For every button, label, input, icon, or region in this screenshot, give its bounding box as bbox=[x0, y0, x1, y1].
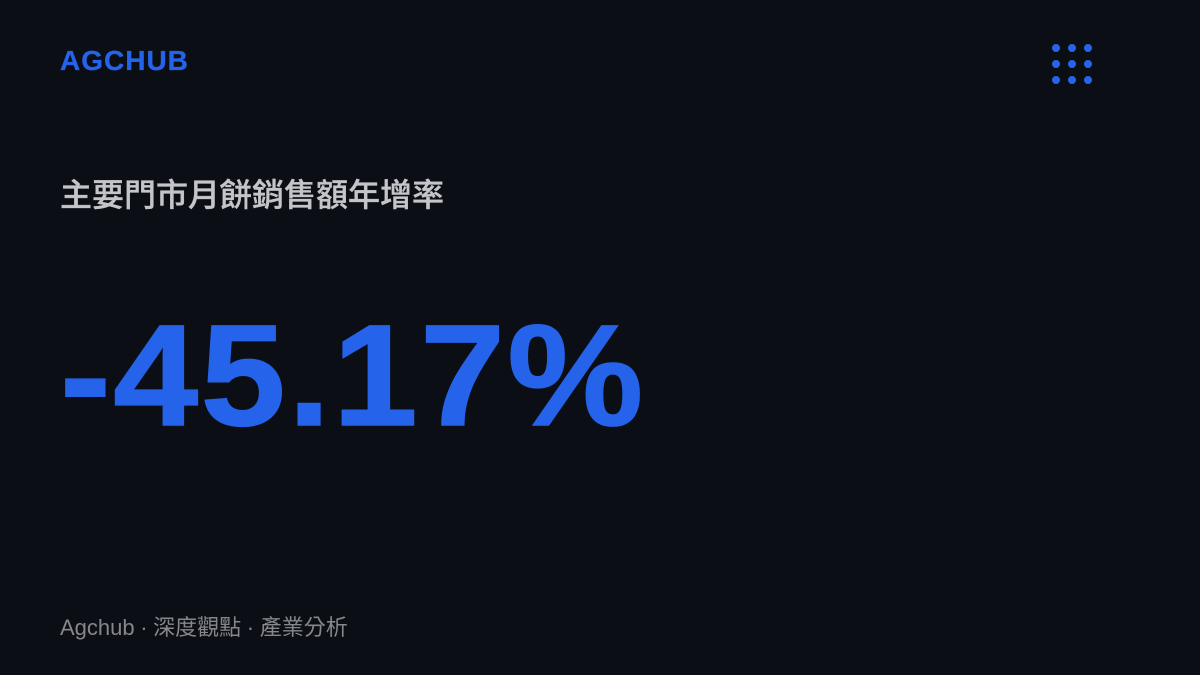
footer text: Agchub · 深度觀點 · 產業分析 bbox=[60, 615, 348, 640]
heading: metric title: 主要門市月餅銷售額年增率 bbox=[60, 177, 444, 213]
big number: growth rate: -45.17% bbox=[60, 295, 646, 456]
brand logo: AGCHUB: AGCHUB bbox=[60, 45, 189, 76]
icon: dot grid bbox=[1052, 44, 1092, 84]
